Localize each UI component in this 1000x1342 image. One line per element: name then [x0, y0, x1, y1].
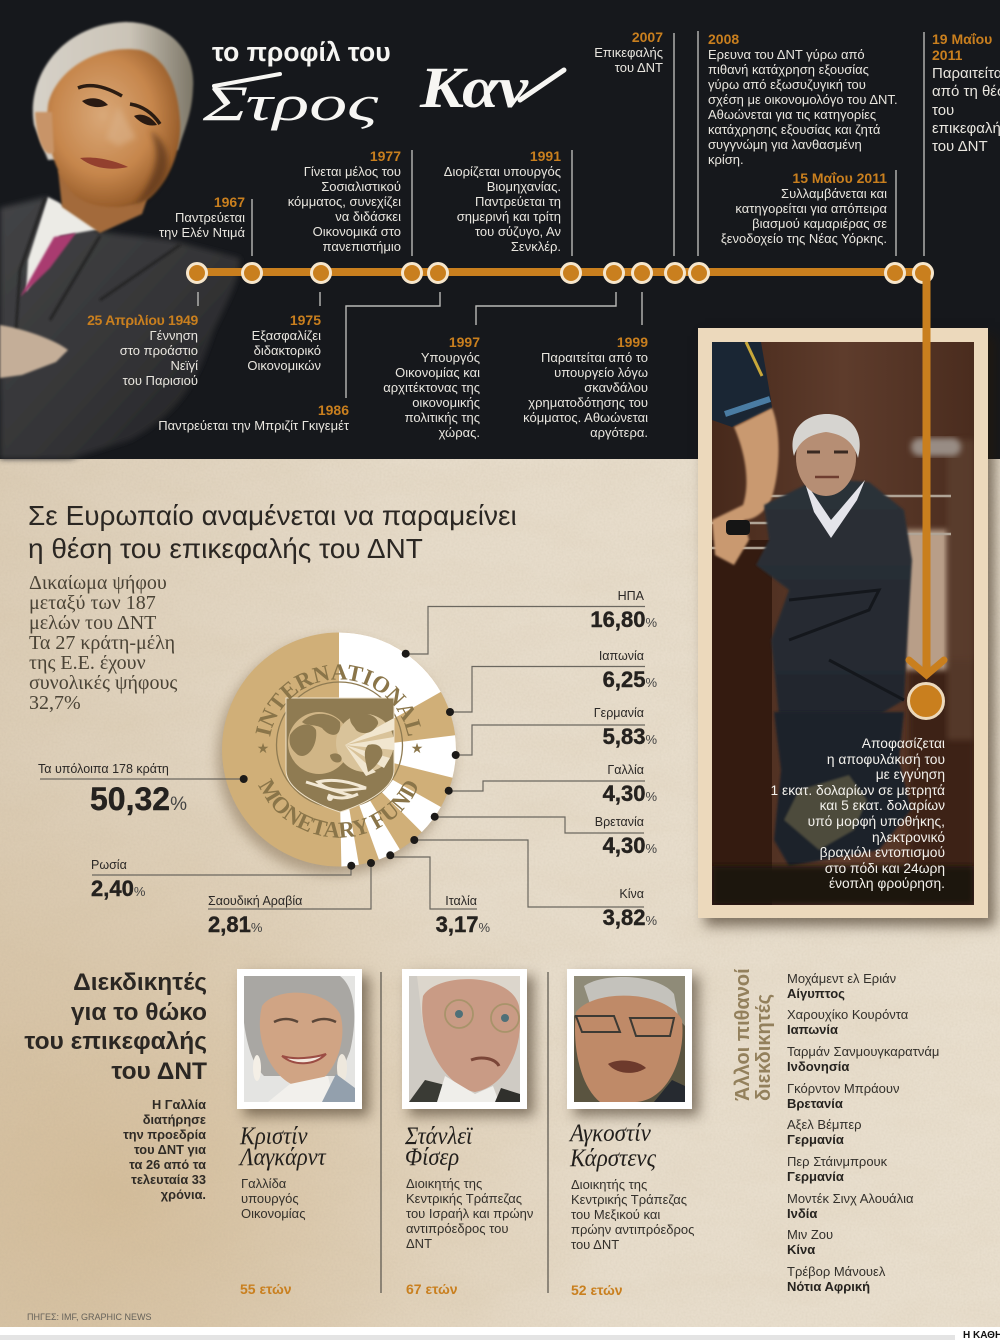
label: Japan	[599, 649, 657, 692]
event 1949: του Παρισιού	[123, 373, 198, 388]
candidate description: Carstens: του Μεξικού και	[571, 1207, 660, 1222]
event 1991	[444, 148, 561, 254]
label: Japan: Ιαπωνία	[599, 649, 644, 663]
bail decision text: ένοπλη φρούρηση.	[829, 876, 945, 891]
candidates note: τα 26 από τα	[129, 1157, 206, 1172]
event 1999	[523, 334, 648, 440]
other candidate 5: Γερμανία	[787, 1132, 844, 1147]
voting rights paragraph: μελών του ΔΝΤ	[29, 612, 156, 634]
other candidate 2: Ιαπωνία	[787, 1022, 838, 1037]
label: Italy: 3,17%	[436, 912, 490, 937]
footer stripe	[0, 1335, 955, 1340]
label: China	[602, 887, 657, 930]
candidates note: Η Γαλλία	[152, 1097, 206, 1112]
label: France	[602, 763, 657, 806]
event 2007: Επικεφαλής	[594, 45, 663, 60]
event 1977: Σοσιαλιστικού	[321, 179, 401, 194]
voting rights paragraph	[29, 572, 178, 714]
event 1997: Οικονομίας και	[395, 365, 480, 380]
pie shadow	[217, 639, 453, 875]
event 1997	[383, 334, 480, 440]
candidate description: Carstens	[571, 1177, 694, 1252]
candidate description: Fischer: Κεντρικής Τράπεζας	[406, 1191, 522, 1206]
other candidate 9: Νότια Αφρική	[787, 1279, 870, 1294]
other candidate 7: Μοντέκ Σινχ Αλουάλια	[787, 1191, 913, 1206]
candidate name: Fischer: Στάνλεϊ	[405, 1123, 472, 1150]
event 1991: Σενκλέρ.	[511, 239, 561, 254]
candidate photo: Carstens	[567, 969, 692, 1109]
signature: Στρος Καν: Στρος	[201, 75, 379, 131]
label: China: Κίνα	[619, 887, 644, 901]
bail decision text: και 5 εκατ. δολαρίων	[820, 798, 945, 813]
other candidate 4: Βρετανία	[787, 1096, 843, 1111]
chart heading	[28, 500, 517, 564]
emblem: ★	[257, 741, 269, 757]
label: USA: 16,80%	[590, 607, 657, 632]
candidates note: διατήρησε	[143, 1112, 206, 1127]
other candidate 3	[787, 1044, 939, 1074]
other candidate 5: Αξελ Βέμπερ	[787, 1117, 862, 1132]
event 2008: Ερευνα του ΔΝΤ γύρω από	[708, 47, 865, 62]
voting rights paragraph: 32,7%	[29, 692, 81, 714]
label: France: 4,30%	[603, 781, 657, 806]
other candidate 1: Αίγυπτος	[787, 986, 845, 1001]
pie base: rest of states	[222, 632, 456, 866]
bail decision text: Αποφασίζεται	[862, 736, 945, 751]
event 2008	[708, 31, 898, 167]
label: remaining states	[38, 762, 187, 817]
label: Saudi Arabia: Σαουδική Αραβία	[208, 894, 302, 908]
event 1999: Παραιτείται από το	[541, 350, 648, 365]
event 2008: πιθανή κατάχρηση εξουσίας	[708, 62, 869, 77]
event 1977: Γίνεται μέλος του	[304, 164, 401, 179]
chart heading: η θέση του επικεφαλής του ΔΝΤ	[28, 533, 423, 564]
event 1949: στο προάστιο	[120, 343, 198, 358]
label: UK: 4,30%	[603, 833, 657, 858]
other candidate 9: Τρέβορ Μάνουελ	[787, 1264, 885, 1279]
other candidates vertical title: διεκδικητές	[753, 994, 775, 1101]
candidate name: Carstens: Αγκοστίν	[570, 1120, 651, 1147]
label: Germany	[594, 706, 657, 749]
event 15 May 2011: 15 Μαΐου 2011	[792, 170, 887, 186]
bail decision text: υπό μορφή υποθήκης,	[808, 814, 945, 829]
label: China: 3,82%	[603, 905, 657, 930]
event 19 May 2011	[932, 31, 1000, 155]
candidate name: Fischer	[405, 1123, 473, 1171]
other candidate 6: Περ Στάινμπρουκ	[787, 1154, 887, 1169]
event 1991: σημερινή και τρίτη	[457, 209, 561, 224]
label: Italy	[436, 894, 490, 937]
event 15 May 2011	[721, 170, 887, 246]
event 1949: Νεϊγί	[171, 358, 198, 373]
event 19 May 2011: 2011	[932, 46, 962, 62]
event 1997: Υπουργός	[421, 350, 480, 365]
voting rights paragraph: συνολικές ψήφους	[29, 672, 177, 694]
other candidates vertical title	[732, 968, 775, 1101]
candidates note: την προεδρία	[123, 1127, 206, 1142]
candidate name: Carstens	[568, 1120, 656, 1172]
candidate name: Carstens: Κάρστενς	[570, 1145, 656, 1172]
event 2008: κρίση.	[708, 152, 744, 167]
candidate description: Fischer: αντιπρόεδρος του	[406, 1221, 508, 1236]
candidate description: Fischer: Διοικητής της	[406, 1176, 482, 1191]
white wedges	[339, 632, 456, 866]
label: USA	[590, 589, 657, 632]
event 1991: του σύζυγο, Αν	[475, 224, 561, 239]
leader lines	[40, 606, 645, 909]
other candidate 7: Ινδία	[787, 1206, 817, 1221]
candidate description: Fischer: του Ισραήλ και πρώην	[406, 1206, 533, 1221]
title: το προφίλ του	[212, 37, 391, 67]
candidate age: Fischer: 67 ετών	[406, 1281, 458, 1297]
event 1986: 1986	[318, 402, 349, 418]
other candidate 2	[787, 1007, 908, 1037]
candidate description: Fischer	[406, 1176, 533, 1251]
label: UK	[595, 815, 657, 858]
event 1999: χρηματοδότησης του	[528, 395, 648, 410]
event 1991: Διορίζεται υπουργός	[444, 164, 561, 179]
candidates note	[123, 1097, 206, 1202]
event 1967: 1967	[214, 194, 245, 210]
candidate description: Fischer: ΔΝΤ	[406, 1236, 432, 1251]
event 1977: πανεπιστήμιο	[323, 239, 401, 254]
bail decision text: 1 εκατ. δολαρίων σε μετρητά	[771, 783, 945, 798]
event 1977: Οικονομικά στο	[313, 224, 401, 239]
other candidate 2: Χαρουχίκο Κουρόντα	[787, 1007, 908, 1022]
event 2007: του ΔΝΤ	[615, 60, 663, 75]
photo panel: courtroom	[698, 328, 988, 918]
bail decision text: με εγγύηση	[876, 767, 945, 782]
label: USA: ΗΠΑ	[618, 589, 644, 603]
event 1949: 25 Απριλίου 1949	[87, 312, 198, 328]
bail decision text: ηλεκτρονικό	[872, 830, 945, 845]
event 19 May 2011: 19 Μαΐου	[932, 31, 992, 47]
event 1975: διδακτορικό	[254, 343, 321, 358]
event 1999: κόμματος. Αθωώνεται	[523, 410, 648, 425]
chart heading: Σε Ευρωπαίο αναμένεται να παραμείνει	[28, 500, 517, 531]
emblem: MONETARY FUND	[258, 778, 417, 838]
candidates note: του ΔΝΤ για	[134, 1142, 206, 1157]
other candidate 1	[787, 971, 896, 1001]
bail decision text	[771, 736, 945, 891]
event 1997: οικονομικής	[412, 395, 480, 410]
label: UK: Βρετανία	[595, 815, 644, 829]
label: remaining states: Τα υπόλοιπα 178 κράτη	[38, 762, 169, 776]
event 1997: χώρας.	[439, 425, 480, 440]
sources: ΠΗΓΕΣ: IMF, GRAPHIC NEWS	[27, 1312, 152, 1322]
bail decision text: η αποφυλάκισή του	[827, 752, 945, 767]
event 1986	[158, 402, 349, 433]
other candidate 7	[787, 1191, 913, 1221]
event 1967: Παντρεύεται	[175, 210, 245, 225]
event 1991: Βιομηχανίας.	[487, 179, 561, 194]
event 1975: Οικονομικών	[247, 358, 321, 373]
event 1977: 1977	[370, 148, 401, 164]
candidates note: τελευταία 33	[131, 1172, 206, 1187]
label: Italy: Ιταλία	[445, 894, 477, 908]
event 1997: 1997	[449, 334, 480, 350]
label: Russia: 2,40%	[91, 876, 145, 901]
bail decision text: βραχιόλι εντοπισμού	[820, 845, 945, 860]
candidates note: χρόνια.	[161, 1187, 206, 1202]
candidates heading: του επικεφαλής	[24, 1028, 207, 1055]
other candidates vertical title: Άλλοι πιθανοί	[732, 968, 754, 1101]
event 2008: γύρω από εξωσυζυγική του	[708, 77, 866, 92]
event 1977: κόμματος, συνεχίζει	[288, 194, 401, 209]
candidate name: Lagarde: Κριστίν	[240, 1123, 307, 1150]
event 2008: 2008	[708, 31, 739, 47]
label: Russia: Ρωσία	[91, 858, 127, 872]
event 2007	[594, 29, 663, 75]
event 2008: κατάχρησης εξουσίας και ζητά	[708, 122, 880, 137]
event 15 May 2011: Συλλαμβάνεται και	[781, 186, 887, 201]
signature: Στρος Καν: Καν	[419, 55, 529, 120]
event 1967	[159, 194, 245, 240]
event 1991: Παντρεύεται τη	[475, 194, 561, 209]
event 15 May 2011: βιασμού καμαριέρας σε	[752, 216, 887, 231]
event 19 May 2011: του ΔΝΤ	[932, 138, 988, 155]
event 1986: Παντρεύεται την Μπριζίτ Γκιγεμέτ	[158, 418, 349, 433]
event 1975: 1975	[290, 312, 321, 328]
event 2008: συγγνώμη για λανθασμένη	[708, 137, 862, 152]
event 1975: Εξασφαλίζει	[252, 328, 321, 343]
event 1999: 1999	[617, 334, 648, 350]
other candidate 1: Μοχάμεντ ελ Εριάν	[787, 971, 896, 986]
event 1999: σκανδάλου	[584, 380, 648, 395]
event 1997: αρχιτέκτονας της	[383, 380, 480, 395]
other candidate 8: Μιν Ζου	[787, 1227, 833, 1242]
candidate age: Carstens: 52 ετών	[571, 1282, 623, 1298]
label: Japan: 6,25%	[603, 667, 657, 692]
event 1997: πολιτικής της	[405, 410, 480, 425]
candidates heading: Διεκδικητές	[73, 969, 207, 996]
event 1991: 1991	[530, 148, 561, 164]
candidate description: Carstens: του ΔΝΤ	[571, 1237, 619, 1252]
candidate description: Lagarde: Οικονομίας	[241, 1206, 305, 1221]
other candidate 5	[787, 1117, 862, 1147]
event 1975	[247, 312, 321, 373]
voting rights paragraph: Δικαίωμα ψήφου	[29, 572, 167, 594]
event 1967: την Ελέν Ντιμά	[159, 225, 245, 240]
candidates heading: του ΔΝΤ	[111, 1058, 207, 1085]
candidate photo: Fischer	[402, 969, 527, 1109]
emblem: ★	[411, 741, 423, 757]
event 1977	[288, 148, 401, 254]
event 15 May 2011: ξενοδοχείο της Νέας Υόρκης.	[721, 231, 887, 246]
candidate description: Lagarde: υπουργός	[241, 1191, 299, 1206]
candidate description: Carstens: Διοικητής της	[571, 1177, 647, 1192]
label: remaining states: 50,32%	[90, 781, 187, 817]
event 19 May 2011: του	[932, 102, 954, 119]
other candidate 9	[787, 1264, 885, 1294]
other candidate 3: Ινδονησία	[787, 1059, 849, 1074]
candidate description: Lagarde	[241, 1176, 306, 1221]
voting rights paragraph: Τα 27 κράτη-μέλη	[29, 632, 175, 654]
event 2008: σχέση με οικονομολόγο του ΔΝΤ.	[708, 92, 898, 107]
label: Saudi Arabia	[208, 894, 302, 937]
label: France: Γαλλία	[607, 763, 644, 777]
other candidate 3: Ταρμάν Σανμουγκαρατνάμ	[787, 1044, 939, 1059]
dots	[240, 650, 460, 870]
other candidate 8: Κίνα	[787, 1242, 815, 1257]
candidates heading: για το θώκο	[71, 999, 207, 1026]
candidate name: Lagarde	[238, 1123, 326, 1171]
candidate description: Lagarde: Γαλλίδα	[241, 1176, 286, 1191]
emblem: INTERNATIONAL	[256, 664, 421, 736]
voting rights paragraph: μεταξύ των 187	[29, 592, 156, 614]
other candidate 6: Γερμανία	[787, 1169, 844, 1184]
other candidate 4: Γκόρντον Μπράουν	[787, 1081, 899, 1096]
header band	[0, 0, 1000, 459]
event 1949	[87, 312, 198, 388]
emblem	[256, 664, 423, 838]
candidate name: Lagarde: Λαγκάρντ	[240, 1144, 326, 1171]
other candidate 4	[787, 1081, 899, 1111]
candidate age: Lagarde: 55 ετών	[240, 1281, 292, 1297]
event 2008: Αθωώνεται για τις κατηγορίες	[708, 107, 876, 122]
label: Russia	[91, 858, 145, 901]
event 1999: αργότερα.	[590, 425, 648, 440]
event 1977: να διδάσκει	[335, 209, 401, 224]
event 15 May 2011: κατηγορείται για απόπειρα	[735, 201, 887, 216]
label: Saudi Arabia: 2,81%	[208, 912, 262, 937]
voting rights paragraph: της Ε.Ε. έχουν	[29, 652, 146, 674]
bail decision text: στο πόδι και 24ωρη	[825, 861, 945, 876]
label: Germany: Γερμανία	[594, 706, 644, 720]
other candidate 8	[787, 1227, 833, 1257]
candidate photo: Lagarde	[237, 969, 362, 1109]
other candidate 6	[787, 1154, 887, 1184]
event 2007: 2007	[632, 29, 663, 45]
label: Germany: 5,83%	[603, 724, 657, 749]
candidates heading	[24, 969, 207, 1085]
candidate description: Carstens: πρώην αντιπρόεδρος	[571, 1222, 694, 1237]
event 1999: υπουργείο λόγω	[554, 365, 648, 380]
candidate name: Fischer: Φίσερ	[405, 1144, 459, 1171]
event 1949: Γέννηση	[150, 328, 198, 343]
candidate description: Carstens: Κεντρικής Τράπεζας	[571, 1192, 687, 1207]
